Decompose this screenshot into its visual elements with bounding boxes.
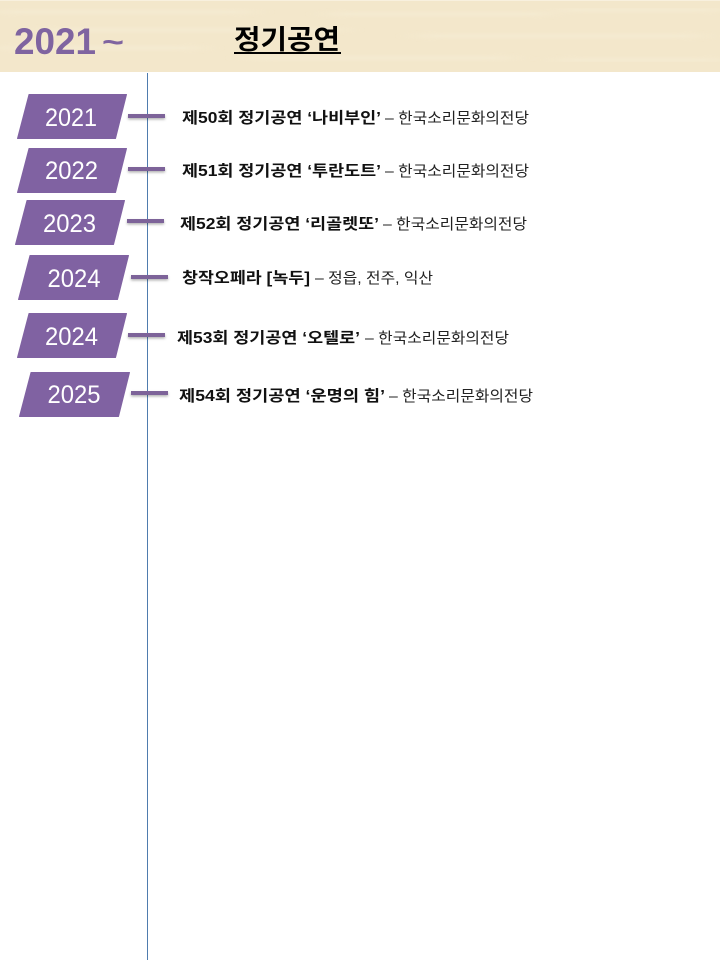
- timeline entry 2023: – 한국소리문화의전당: [383, 216, 527, 233]
- timeline entry 2022: – 한국소리문화의전당: [385, 163, 529, 180]
- timeline axis: [147, 73, 148, 960]
- timeline entry 2021: 제50회 정기공연 ‘나비부인’: [182, 109, 381, 127]
- timeline entry 2024 creative opera: – 정읍, 전주, 익산: [315, 270, 433, 287]
- timeline entry 2024 creative opera: [18, 256, 433, 300]
- timeline entry 2024 Otello: 제53회 정기공연 ‘오텔로’: [177, 329, 360, 347]
- header band: [0, 0, 720, 72]
- timeline entry 2022: [18, 148, 529, 192]
- timeline entry 2024 creative opera: 2024: [48, 265, 101, 293]
- timeline entry 2025: – 한국소리문화의전당: [389, 388, 533, 405]
- timeline entry 2022: 2022: [45, 157, 98, 185]
- timeline entry 2023: [16, 200, 527, 244]
- timeline entry 2024 Otello: [18, 314, 509, 358]
- timeline entry 2023: 2023: [43, 210, 96, 238]
- timeline entry 2024 Otello: – 한국소리문화의전당: [365, 330, 509, 347]
- timeline entry 2021: – 한국소리문화의전당: [385, 110, 529, 127]
- timeline entry 2022: 제51회 정기공연 ‘투란도트’: [182, 162, 381, 180]
- heading: period: ~: [102, 26, 124, 59]
- timeline entry 2025: 제54회 정기공연 ‘운명의 힘’: [179, 387, 385, 405]
- timeline entry 2024 Otello: 2024: [45, 323, 98, 351]
- timeline entry 2023: 제52회 정기공연 ‘리골렛또’: [180, 215, 379, 233]
- timeline entry 2021: [18, 94, 529, 138]
- timeline entry 2021: 2021: [45, 104, 97, 132]
- timeline entry 2025: [20, 372, 533, 416]
- timeline entry 2025: 2025: [48, 381, 100, 409]
- heading: period: 2021: [14, 21, 96, 62]
- heading: title: 정기공연: [234, 25, 340, 55]
- timeline entry 2024 creative opera: 창작오페라 [녹두]: [182, 269, 310, 287]
